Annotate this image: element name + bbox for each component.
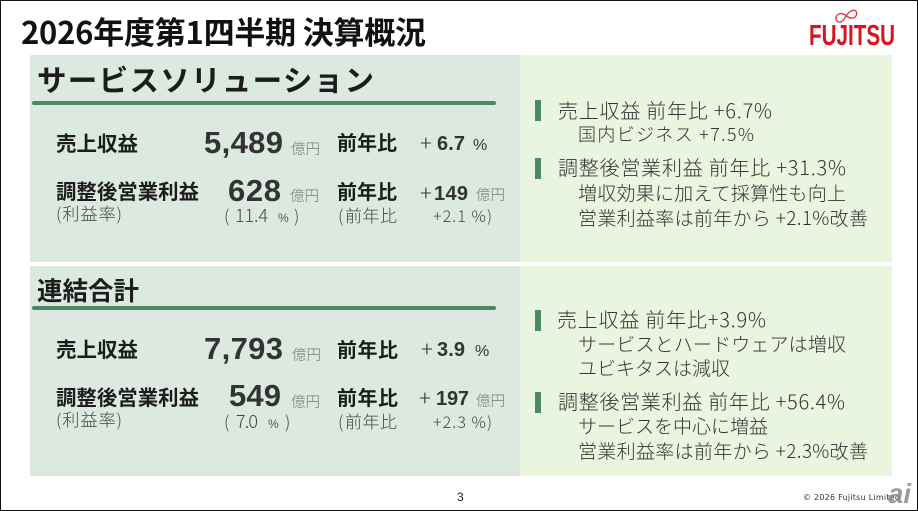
row: profit margin <box>56 406 492 434</box>
row: revenue: % <box>475 343 489 360</box>
row: adjusted operating profit: 億円 <box>291 394 320 411</box>
row: adjusted operating profit: 調整後営業利益 <box>56 181 199 204</box>
row: revenue: 売上収益 <box>56 133 138 156</box>
note: ubiquitous: ユビキタスは減収 <box>578 354 730 381</box>
row: revenue: 億円 <box>292 347 321 364</box>
row: profit margin: ) <box>285 408 290 433</box>
bullet: profit <box>535 158 541 179</box>
row: adjusted operating profit <box>56 173 505 208</box>
row: profit margin: ( <box>224 202 229 227</box>
row: profit margin: % <box>268 417 279 431</box>
panel: service solutions notes <box>520 55 892 262</box>
row: revenue: 前年比 <box>337 339 398 362</box>
row: profit margin: ( <box>338 202 343 227</box>
panel: consolidated notes <box>520 266 892 476</box>
row: adjusted operating profit: 197 <box>436 388 469 410</box>
row: revenue: 6.7 <box>437 133 465 155</box>
row: revenue: 3.9 <box>437 339 465 361</box>
row: profit margin: 前年比 <box>345 408 397 433</box>
heading: service solutions: サービスソリューション <box>37 65 374 98</box>
note: profit: 調整後営業利益 前年比 +56.4% <box>558 386 845 415</box>
row: adjusted operating profit: + <box>419 381 431 413</box>
note: profitability: 増収効果に加えて採算性も向上 <box>578 179 846 206</box>
row: profit margin: 7.0 <box>236 408 258 434</box>
row: adjusted operating profit: 調整後営業利益 <box>56 387 199 410</box>
row: profit margin: % <box>278 211 289 225</box>
page number: 3 <box>457 490 464 504</box>
row: profit margin: (利益率) <box>56 200 122 225</box>
bullet: profit <box>535 392 541 413</box>
row: revenue: 7,793 <box>204 331 283 366</box>
panel: service solutions metrics <box>30 55 520 262</box>
bullet: revenue <box>535 100 541 121</box>
row: revenue: 前年比 <box>337 132 397 155</box>
row: adjusted operating profit <box>56 378 505 413</box>
row: revenue <box>56 125 487 160</box>
row: profit margin: ( <box>224 408 229 433</box>
row: profit margin: 前年比 <box>345 202 397 227</box>
bullet: revenue <box>535 310 541 331</box>
row: adjusted operating profit: 億円 <box>290 188 319 205</box>
note: revenue: 売上収益 前年比 +6.7% <box>558 95 772 124</box>
title: 2026年度第1四半期 決算概況 <box>21 8 426 53</box>
panel: consolidated metrics <box>30 266 520 476</box>
row: adjusted operating profit: 628 <box>228 173 281 208</box>
row: profit margin: +2.3 %) <box>433 409 492 433</box>
row: profit margin: +2.1 %) <box>433 203 492 227</box>
row: adjusted operating profit: 前年比 <box>337 181 397 204</box>
row: adjusted operating profit: 549 <box>229 378 281 413</box>
note: profit: 調整後営業利益 前年比 +31.3% <box>558 152 846 181</box>
row: revenue: % <box>473 137 487 154</box>
row: adjusted operating profit: 億円 <box>476 187 505 204</box>
note: services and hardware: サービスとハードウェアは増収 <box>578 330 846 357</box>
icon: Fujitsu logo <box>809 10 895 52</box>
row: adjusted operating profit: + <box>420 176 432 208</box>
row: profit margin: (利益率) <box>56 406 122 431</box>
row: adjusted operating profit: 149 <box>434 183 468 205</box>
icon: ai watermark: ai <box>888 478 912 509</box>
row: profit margin <box>56 200 492 228</box>
row: revenue: + <box>420 126 432 158</box>
heading: consolidated total: 連結合計 <box>37 278 139 306</box>
copyright: © 2026 Fujitsu Limited <box>803 493 900 502</box>
note: margin: 営業利益率は前年から +2.3%改善 <box>578 437 868 464</box>
note: services-led profit: サービスを中心に増益 <box>578 412 768 439</box>
row: profit margin: ( <box>338 408 343 433</box>
row: adjusted operating profit: 億円 <box>476 393 505 410</box>
row: adjusted operating profit: 前年比 <box>337 387 398 410</box>
row: revenue: 億円 <box>291 141 320 158</box>
row: revenue: 5,489 <box>204 125 283 160</box>
row: profit margin: ) <box>294 202 299 227</box>
note: margin: 営業利益率は前年から +2.1%改善 <box>578 204 868 231</box>
note: domestic business: 国内ビジネス +7.5% <box>578 121 754 147</box>
note: revenue: 売上収益 前年比+3.9% <box>557 304 766 333</box>
row: revenue: 売上収益 <box>56 339 138 362</box>
row: profit margin: 11.4 <box>235 202 268 228</box>
row: revenue: + <box>421 332 433 364</box>
row: revenue <box>56 331 489 366</box>
